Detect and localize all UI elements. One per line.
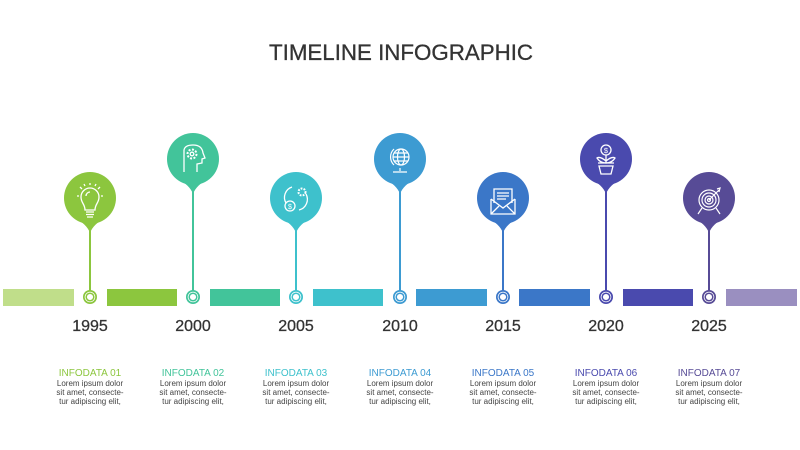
description texts: Lorem ipsum dolor [573,379,639,388]
description texts: sit amet, consecte- [159,388,227,397]
infodata labels: INFODATA 05 [472,368,535,379]
milestone 1995 [64,172,116,304]
years: 2020 [588,318,624,335]
description texts: tur adipiscing elit, [575,397,637,406]
description texts: tur adipiscing elit, [59,397,121,406]
description texts: Lorem ipsum dolor [160,379,226,388]
description texts: Lorem ipsum dolor [57,379,123,388]
years: 2025 [691,318,727,335]
icon: money plant: $ [604,146,609,155]
timeline bar [3,289,797,306]
infodata labels: INFODATA 02 [162,368,225,379]
description texts: sit amet, consecte- [56,388,124,397]
infodata labels: INFODATA 06 [575,368,638,379]
milestone 2000 [167,133,219,304]
description texts: tur adipiscing elit, [472,397,534,406]
infodata labels: INFODATA 03 [265,368,328,379]
years: 1995 [72,318,108,335]
milestone 2020 [580,133,632,304]
icon: money cycle: $ [288,204,292,211]
years: 2015 [485,318,521,335]
years: 2000 [175,318,211,335]
milestone 2005 [270,172,322,304]
icon: head with gear [184,145,205,172]
icon: globe [391,149,409,172]
description texts: sit amet, consecte- [675,388,743,397]
infodata labels: INFODATA 07 [678,368,741,379]
description texts: tur adipiscing elit, [678,397,740,406]
milestone 2015 [477,172,529,304]
description texts: Lorem ipsum dolor [367,379,433,388]
years: 2010 [382,318,418,335]
infodata labels [59,368,741,379]
infodata labels: INFODATA 04 [369,368,432,379]
description texts: sit amet, consecte- [366,388,434,397]
description texts: Lorem ipsum dolor [263,379,329,388]
years [72,318,727,335]
description texts: tur adipiscing elit, [162,397,224,406]
milestone 2025 [683,172,735,304]
description texts: tur adipiscing elit, [369,397,431,406]
title: TIMELINE INFOGRAPHIC [269,40,533,65]
years: 2005 [278,318,314,335]
description texts: Lorem ipsum dolor [470,379,536,388]
icon: target [698,188,720,214]
description texts: Lorem ipsum dolor [676,379,742,388]
icon: light bulb [77,183,103,217]
infodata labels: INFODATA 01 [59,368,122,379]
description texts: sit amet, consecte- [572,388,640,397]
description texts [56,379,743,406]
description texts: sit amet, consecte- [262,388,330,397]
description texts: tur adipiscing elit, [265,397,327,406]
description texts: sit amet, consecte- [469,388,537,397]
icon: envelope [491,189,515,214]
milestone 2010 [374,133,426,304]
icon: money plant [597,145,615,174]
